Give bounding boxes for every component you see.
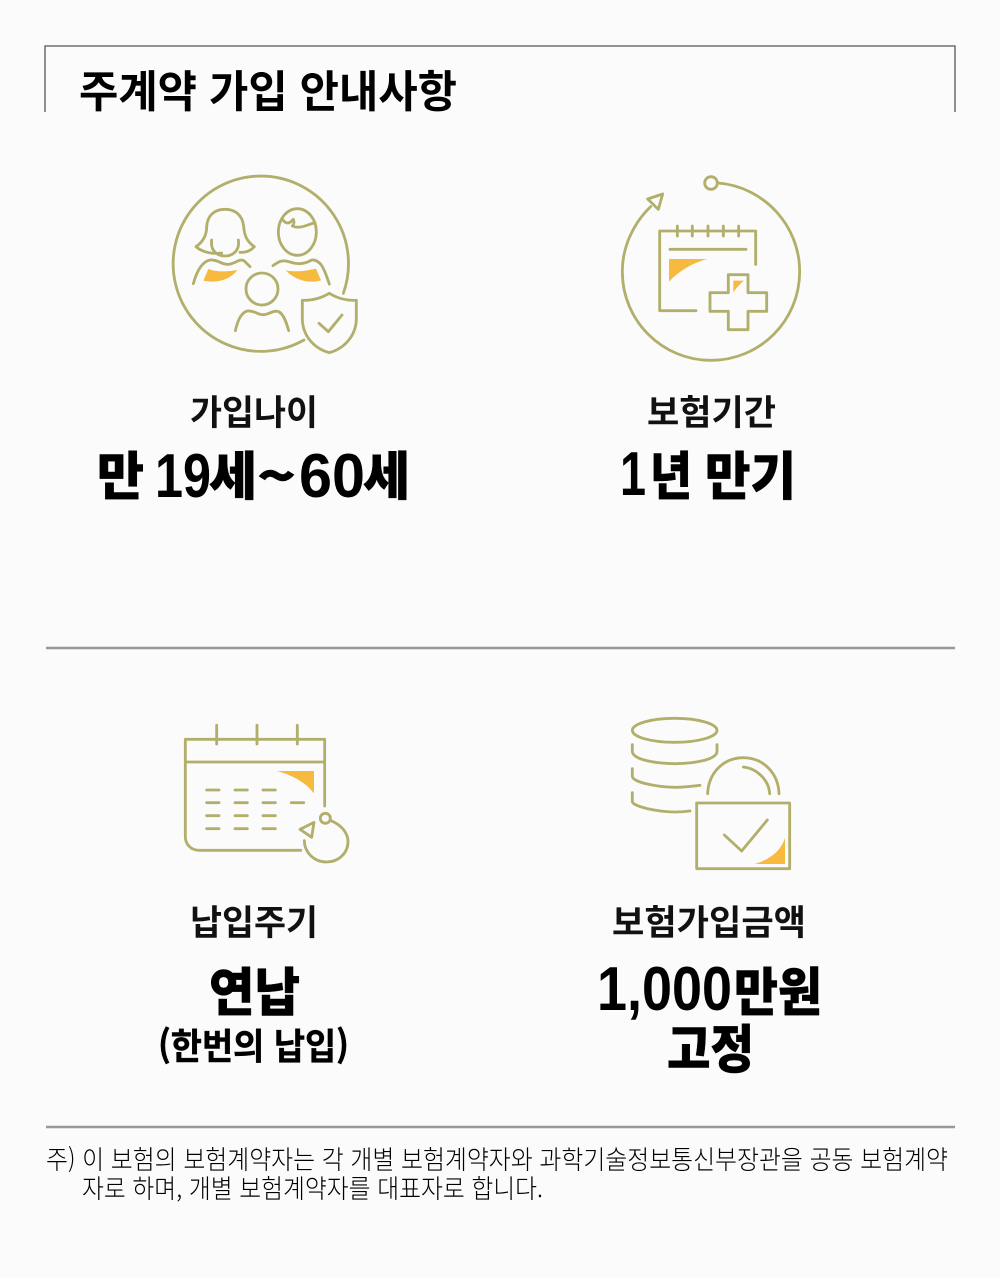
- value: age: [97, 435, 410, 511]
- value: ten million won: 만원: [734, 951, 822, 1026]
- value: period: 만기: [705, 435, 796, 510]
- icon: coins with padlock: [632, 718, 790, 869]
- value: period: 년: [650, 435, 692, 510]
- label: age: 가입나이: [190, 385, 318, 436]
- value: ten million won: [597, 951, 822, 1026]
- value: age: 19: [155, 442, 211, 511]
- footnote: 자로 하며, 개별 보험계약자를 대표자로 합니다.: [82, 1169, 543, 1206]
- label: period: 보험기간: [647, 385, 776, 436]
- note: single payment: (한번의 납입): [158, 1018, 349, 1070]
- value: period: [620, 435, 796, 510]
- value: age: 만: [97, 435, 144, 510]
- label: payment cycle: 납입주기: [190, 895, 318, 946]
- section divider: [46, 1126, 955, 1128]
- block: payment cycle: [158, 895, 349, 1070]
- title frame: [45, 46, 955, 112]
- value: age: 세: [363, 435, 410, 510]
- block: period: [620, 385, 796, 510]
- block: sum insured: [597, 895, 822, 1083]
- value: age: 세: [209, 435, 257, 510]
- section divider: [46, 647, 955, 649]
- value: age: 60: [299, 442, 365, 511]
- value: annual payment: 연납: [209, 951, 300, 1026]
- value: ten million won: 1,000: [597, 955, 732, 1024]
- value: age: ~: [257, 435, 296, 510]
- footnote: 주) 이 보험의 보험계약자는 각 개별 보험계약자와 과학기술정보통신부장관을 공동 보험계약: [46, 1140, 948, 1177]
- value: period: 1: [620, 440, 646, 509]
- icon: calendar with refresh: [185, 725, 348, 862]
- icon: calendar with medical cross: [622, 177, 800, 360]
- title: 주계약 가입 안내사항: [79, 56, 457, 120]
- value: fixed: 고정: [667, 1008, 754, 1083]
- footnote: [46, 1140, 948, 1206]
- label: sum insured: 보험가입금액: [612, 895, 806, 946]
- icon: family with shield: [173, 176, 356, 353]
- block: age: [97, 385, 410, 511]
